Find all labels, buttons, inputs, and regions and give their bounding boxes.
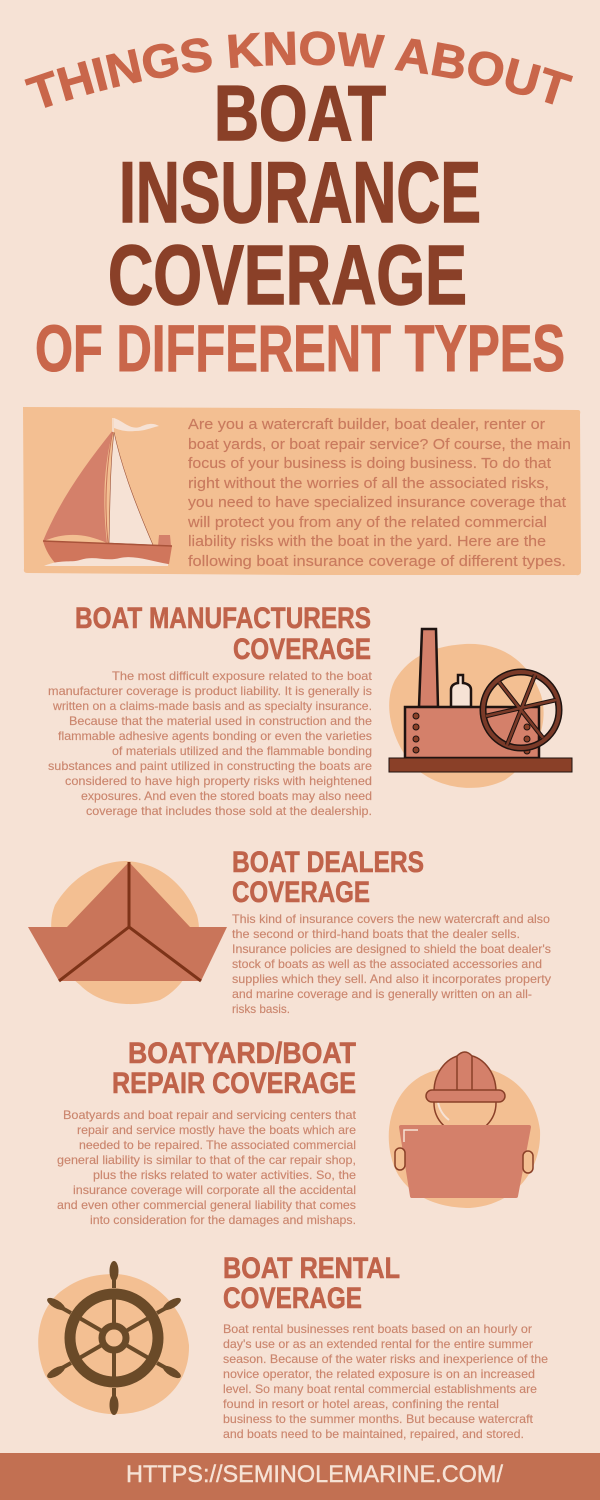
- body text: and boats need to be maintained, repaired, and stored.: [223, 1427, 524, 1441]
- heading: COVERAGE: [232, 876, 370, 909]
- intro text: following boat insurance coverage of different types.: [188, 553, 566, 570]
- body text: [223, 1322, 548, 1441]
- body text: season. Because of the water risks and inexperience of the: [223, 1352, 548, 1366]
- body text: business to the summer months. But because watercraft: [223, 1412, 534, 1426]
- icon: ship wheel: [38, 1261, 189, 1415]
- intro text: Are you a watercraft builder, boat dealer, renter or: [188, 416, 545, 433]
- panel: boatyard / boat repair coverage: [57, 1037, 540, 1227]
- heading: [75, 602, 371, 666]
- heading: [112, 1037, 356, 1100]
- footer: [0, 1453, 600, 1500]
- heading: COVERAGE: [223, 1282, 362, 1315]
- body text: written on a claims-made basis and as specialty insurance.: [52, 699, 372, 713]
- icon: sailboat: [43, 418, 172, 566]
- icon: paper boat: [28, 861, 227, 1004]
- body text: stock of boats as well as the associated accessories and: [232, 957, 542, 971]
- body text: The most difficult exposure related to the boat: [112, 669, 373, 683]
- body text: of materials utilized and the flammable bonding: [112, 744, 372, 758]
- body text: day's use or as an extended rental for the entire summer: [223, 1337, 533, 1351]
- heading: BOAT DEALERS: [232, 846, 424, 879]
- body text: the second or third-hand boats that the dealer sells.: [232, 927, 520, 941]
- body text: [57, 1108, 357, 1227]
- body text: coverage that includes those sold at the dealership.: [86, 804, 372, 818]
- body text: insurance coverage will corporate all the accidental: [73, 1183, 356, 1197]
- heading: COVERAGE: [233, 633, 371, 666]
- body text: plus the risks related to water activities. So, the: [93, 1168, 356, 1182]
- heading: BOATYARD/BOAT: [128, 1037, 356, 1070]
- intro text: [187, 416, 571, 570]
- body text: needed to be repaired. The associated commercial: [79, 1138, 356, 1152]
- intro text: will protect you from any of the related commercial: [187, 514, 547, 531]
- body text: level. So many boat rental commercial establishments are: [223, 1382, 537, 1396]
- body text: novice operator, the related exposure is on an increased: [223, 1367, 535, 1381]
- intro text: liability risks with the boat in the yard. Here are the: [188, 533, 546, 550]
- title line: boat: BOAT: [214, 69, 386, 157]
- body text: and even other commercial general liability that comes: [57, 1198, 356, 1212]
- title: [24, 31, 573, 385]
- body text: into consideration for the damages and mishaps.: [90, 1213, 356, 1227]
- body text: found in resort or hotel areas, confining the rental: [223, 1397, 499, 1411]
- heading: [232, 846, 424, 909]
- intro text: you need to have specialized insurance coverage that: [188, 494, 567, 511]
- body text: exposures. And even the stored boats may also need: [81, 789, 372, 803]
- body text: repair and service mostly have the boats which are: [77, 1123, 356, 1137]
- icon: worker with sign: [389, 1052, 540, 1208]
- body text: [232, 912, 551, 1016]
- panel: boat rental coverage: [38, 1252, 548, 1441]
- body text: This kind of insurance covers the new watercraft and also: [232, 912, 550, 926]
- body text: flammable adhesive agents bonding or even the varieties: [58, 729, 372, 743]
- title line: coverage: COVERAGE: [108, 228, 467, 322]
- panel: boat manufacturers coverage: [48, 602, 572, 818]
- body text: supplies which they sell. And also it incorporates property: [232, 972, 551, 986]
- body text: Boatyards and boat repair and servicing centers that: [63, 1108, 357, 1122]
- body text: Insurance policies are designed to shield the boat dealer's: [232, 942, 551, 956]
- heading: REPAIR COVERAGE: [112, 1067, 356, 1100]
- body text: substances and paint utilized in constructing the boats are: [48, 759, 372, 773]
- footer url: HTTPS://SEMINOLEMARINE.COM/: [126, 1461, 503, 1488]
- panel: boat dealers coverage: [28, 846, 551, 1016]
- body text: general liability is similar to that of the car repair shop,: [57, 1153, 356, 1167]
- icon: steam engine: [389, 629, 572, 788]
- body text: manufacturer coverage is product liability. It is generally is: [48, 684, 372, 698]
- body text: and marine coverage and is generally written on an all-: [232, 987, 532, 1001]
- intro text: boat yards, or boat repair service? Of course, the main: [188, 436, 571, 453]
- body text: [48, 669, 373, 818]
- body text: Because that the material used in construction and the: [69, 714, 372, 728]
- heading: BOAT MANUFACTURERS: [75, 602, 371, 635]
- body text: considered to have high property risks with heightened: [65, 774, 372, 788]
- panel: introduction: [23, 407, 581, 575]
- title line: things know about: THINGS KNOW ABOUT: [24, 31, 573, 108]
- intro text: right without the worries of all the associated risks,: [188, 475, 549, 492]
- body text: Boat rental businesses rent boats based on an hourly or: [223, 1322, 532, 1336]
- intro text: focus of your business is doing business. To do that: [188, 455, 552, 472]
- body text: risks basis.: [232, 1002, 290, 1016]
- heading: BOAT RENTAL: [223, 1252, 400, 1285]
- heading: [223, 1252, 400, 1315]
- intro background: [23, 407, 581, 575]
